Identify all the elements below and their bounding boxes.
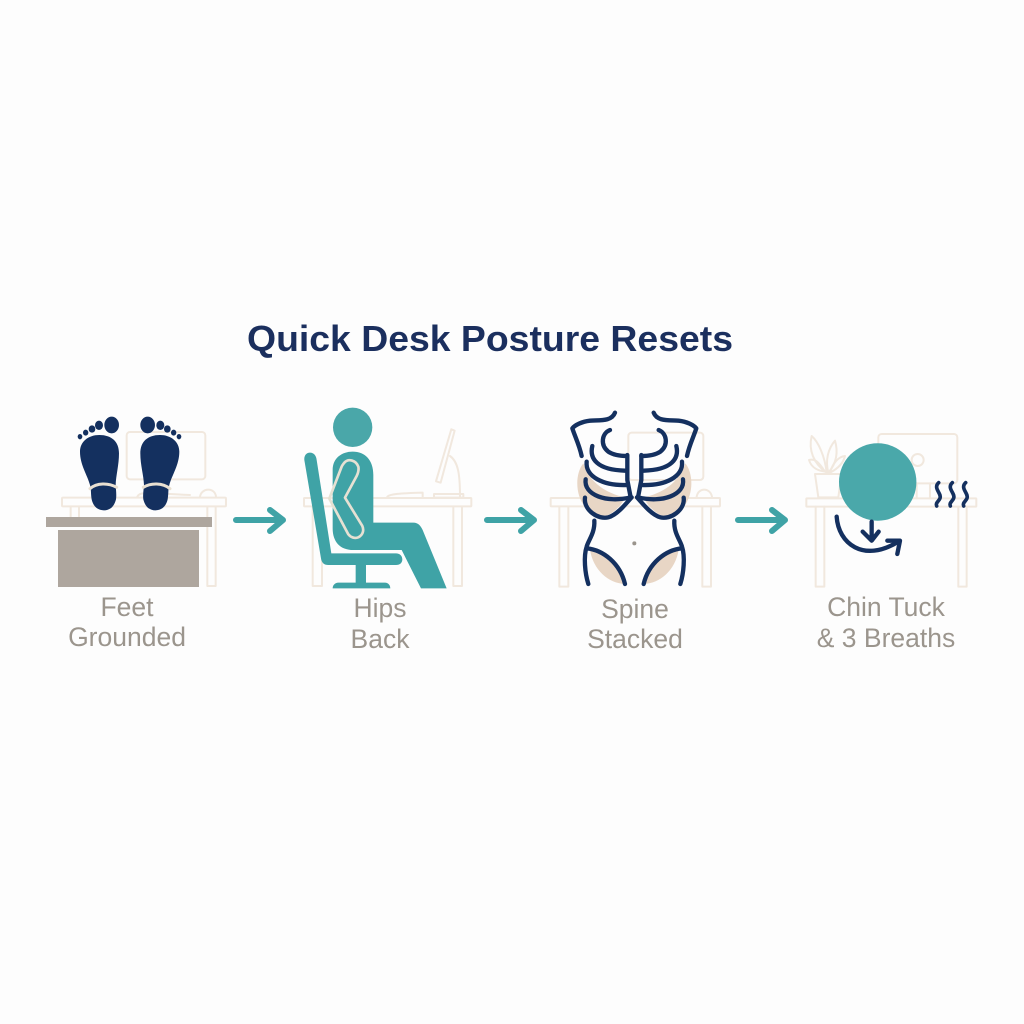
panel: chin tuck and breaths: [806, 434, 976, 653]
background desk and monitor: [551, 433, 720, 587]
head: [333, 408, 372, 447]
icon: two feet: [78, 417, 181, 510]
chair: [304, 453, 402, 588]
background desk, monitor and plant: [806, 434, 976, 587]
panel: spine stacked: [551, 413, 720, 654]
background desk and monitor: [304, 429, 471, 586]
right ribs: [637, 413, 696, 584]
arrow 1: [236, 510, 283, 531]
left ribs: [572, 413, 632, 584]
icon: seated figure: [304, 408, 447, 588]
grey desk block: [46, 517, 212, 587]
torso and leg: [333, 452, 447, 588]
panel: hips back: [304, 408, 471, 654]
label: chin tuck and 3 breaths: Chin Tuck: [827, 592, 946, 622]
label: spine stacked: Spine: [601, 594, 669, 624]
navel: [632, 541, 636, 545]
label: hips back: Back: [351, 624, 410, 654]
background desk and monitor: [62, 432, 226, 586]
panel: feet grounded: [46, 417, 226, 652]
title: Quick Desk Posture Resets: [247, 318, 733, 359]
arm outline: [329, 460, 363, 538]
arrow 2: [487, 510, 534, 531]
icon: rib cage and hips: [572, 413, 696, 584]
arrow 3: [738, 510, 785, 531]
beige body shading: [577, 463, 691, 584]
label: feet grounded: Grounded: [68, 622, 186, 652]
label: feet grounded: Feet: [100, 592, 154, 622]
label: chin tuck and 3 breaths: & 3 Breaths: [817, 623, 955, 653]
icon: teal head circle: [839, 443, 916, 521]
label: hips back: Hips: [353, 593, 407, 623]
icon: breath waves: [936, 483, 967, 506]
label: spine stacked: Stacked: [587, 624, 683, 654]
icon: chin tuck arrows: [837, 517, 900, 554]
